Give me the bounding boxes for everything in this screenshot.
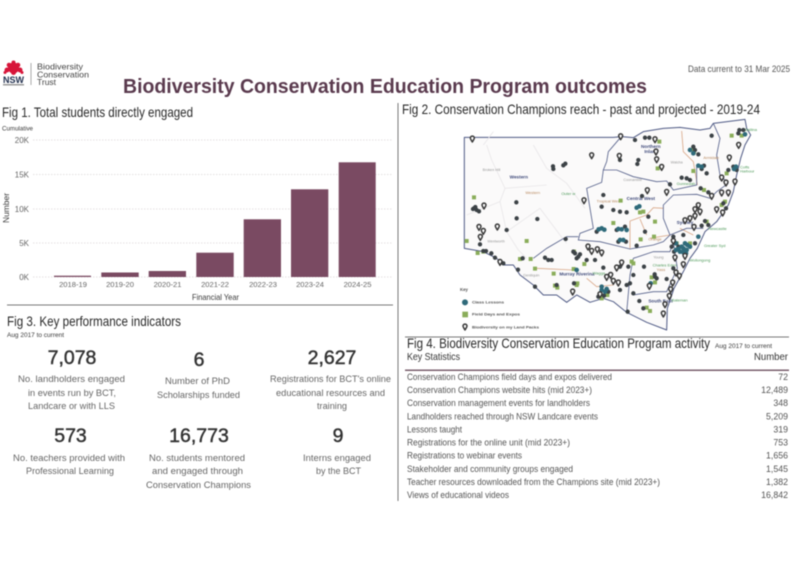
table rows: 1,656 [766,451,788,461]
KPI: landholders [18,347,125,412]
y axis labels [15,136,30,282]
table rows: 1,382 [766,477,788,487]
subheading: date range: Aug 2017 to current [715,344,772,350]
x axis labels: 2022-23 [249,280,277,289]
table header: Number [754,351,788,363]
y axis labels: 10K [15,205,30,214]
orange local boundaries [537,131,697,287]
region labels: Charles Eden [653,263,677,268]
table rows: 16,842 [761,490,788,500]
KPI: online registrations: Registrations for BCT's online [270,374,391,385]
table rows: Conservation management events for landholders [407,398,591,408]
map key [460,287,540,330]
KPI: online registrations [270,347,391,412]
region labels: Central West [627,196,655,201]
KPI: teachers: Professional Learning [26,466,114,477]
title: Biodiversity Conservation Education Program outcomes [123,75,647,98]
region labels: Outer w [561,191,575,196]
table rows: Landholders reached through NSW Landcare events [407,411,599,421]
table header [407,351,788,363]
region labels [483,127,758,303]
logo: NSW Biodiversity Conservation Trust [3,60,89,87]
KPI: interns: Interns engaged [303,453,371,464]
y axis title: Number [1,193,11,223]
region labels: Gunnedah [677,181,695,186]
region labels: Young [653,255,664,259]
minor region boundaries [467,132,585,258]
table rows: Teacher resources downloaded from the Champions site (mid 2023+) [407,477,660,487]
region labels: Bateman [672,298,688,303]
map of NSW [460,119,758,330]
x axis labels: 2023-24 [296,280,324,289]
map key: Key [460,287,469,292]
table rows: Lessons taught [407,424,463,434]
KPI: teachers: 573 [54,425,87,447]
markers: biodiversity packs [470,134,741,317]
bar chart [54,162,376,277]
KPI: online registrations: training [317,401,347,412]
region labels: Wentworth [487,239,505,243]
table rows: 72 [778,372,788,382]
logo: NSW Biodiversity Conservation Trust: Conservation [37,69,89,79]
x axis labels [59,280,371,289]
region labels: Ballina [745,127,758,132]
region labels: Harbour [740,168,755,173]
logo: NSW Biodiversity Conservation Trust: NSW [3,75,24,86]
KPI: landholders: 7,078 [48,347,96,369]
key: field days: Field Days and Expos [472,311,521,316]
KPI: landholders: in events run by BCT, [28,388,116,399]
region labels: Wagga [593,270,606,275]
region labels: Armidale [703,155,720,160]
markers: class lessons [577,134,745,292]
region labels: Sydney [677,220,694,225]
region labels: Northern [641,144,661,149]
logo: NSW Biodiversity Conservation Trust: Trust [37,77,57,87]
markers: dark points [473,130,743,312]
KPI: students: No. students mentored [149,453,245,464]
panel: Fig 3 key performance indicators [7,313,391,491]
x axis labels: 2020-21 [154,280,181,289]
KPI: interns: by the BCT [316,466,361,477]
x axis labels: 2021-22 [201,280,229,289]
region labels: Yass [657,267,665,272]
x axis title: Financial Year [192,292,239,302]
region labels: Newcastle [708,226,727,231]
table rows: 5,209 [766,411,788,421]
table rows: Registrations for the online unit (mid 2023+) [407,438,570,448]
KPI: landholders: No. landholders engaged [18,374,125,385]
KPI: online registrations: 2,627 [308,347,356,369]
markers: field days and expos [467,136,742,311]
panel: Fig 1 students chart [1,104,393,302]
region labels: Western [525,190,540,195]
region boundaries [533,123,728,312]
region labels: Deniliquin [523,274,539,278]
KPI: students: 16,773 [169,425,229,447]
table rows [407,372,788,500]
region labels: Murray Riverina [559,271,595,276]
y axis labels: 0K [19,273,30,282]
panel: Fig 4 activity table [405,335,789,500]
region labels: Orange [648,237,662,242]
key: packs: Biodiversity on my Land Packs [472,325,540,330]
icon: waratah [4,60,24,75]
region labels: Walcha [671,160,684,164]
KPI: interns [303,425,371,477]
KPI: PhD scholarships [157,349,240,401]
heading: Fig 3: Fig 3. Key performance indicators [7,313,181,329]
y axis labels: 15K [15,170,30,180]
KPI: online registrations: educational resources and [276,388,385,399]
y axis labels: 20K [15,136,30,145]
state outline [464,119,751,330]
table rows: 12,489 [761,385,788,395]
logo: NSW Biodiversity Conservation Trust: Biodiversity [37,62,84,72]
region labels: Coffs [740,164,749,169]
region labels: Broken Hill [483,168,501,172]
table rows: Stakeholder and community groups engaged [407,464,573,474]
y axis labels: 5K [19,239,30,248]
region labels: Inland [644,149,658,154]
region labels: Wollongong [689,258,710,263]
KPI: students [146,425,251,491]
table rows: 319 [773,424,788,434]
subheading: cumulative: Cumulative [2,126,33,132]
table rows: Registrations to webinar events [407,451,523,461]
subheading: date range: Aug 2017 to current [7,333,64,339]
table rows: Conservation Champions website hits (mid 2023+) [407,385,592,395]
table rows: Conservation Champions field days and expos delivered [407,372,612,382]
table header: Key Statistics [407,351,460,363]
x axis labels: 2024-25 [344,280,371,289]
x axis labels: 2019-20 [106,280,134,289]
KPI: students: Conservation Champions [146,480,251,491]
region labels: Western [510,175,528,180]
KPI: interns: 9 [333,425,343,447]
heading: Fig 4: Fig 4. Biodiversity Conservation Education Program activity [407,335,710,351]
heading: Fig 1: Fig 1. Total students directly engaged [2,104,193,120]
table rows: 348 [773,398,788,408]
table rows: 1,545 [766,464,788,474]
table rows: 753 [773,438,788,448]
table rows: Views of educational videos [407,490,510,500]
KPI: landholders: Landcare or with LLS [28,401,115,412]
region labels: Greater Syd [704,243,725,248]
region labels: South East [648,298,673,303]
KPI: PhD scholarships: Number of PhD [165,376,230,387]
panel: Fig 2 map [402,101,760,330]
KPI: students: and engaged through [152,466,243,477]
region labels: Tropical West [597,198,622,203]
KPI: teachers [13,425,125,477]
KPI: PhD scholarships: Scholarships funded [157,390,240,401]
x axis labels: 2018-19 [59,280,87,289]
KPI: teachers: No. teachers provided with [13,453,125,464]
key: class lessons: Class Lessons [472,300,505,305]
KPI: PhD scholarships: 6 [194,349,204,371]
region labels: Coonamble [623,178,642,182]
